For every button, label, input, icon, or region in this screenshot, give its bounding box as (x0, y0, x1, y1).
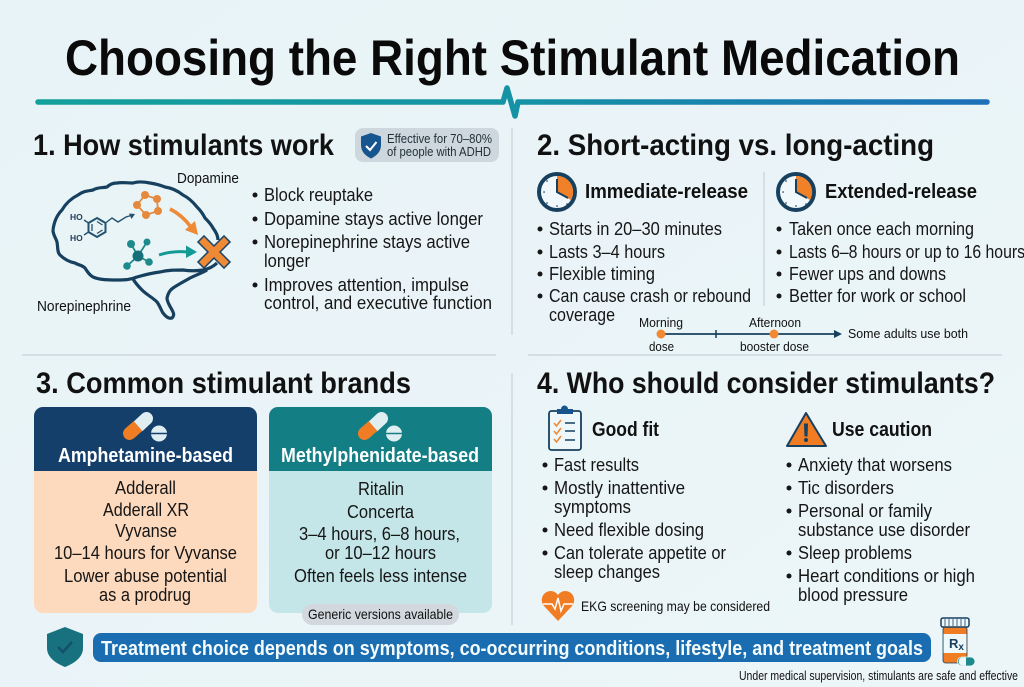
card text: as a prodrug (99, 585, 191, 605)
dopamine molecule structure (70, 212, 135, 243)
card text: Concerta (347, 502, 415, 522)
label: dopamine: Dopamine (177, 171, 239, 187)
brain stem (133, 270, 207, 318)
icon: pills (130, 418, 167, 442)
list: use caution: Anxiety that worsens (798, 455, 952, 475)
dopamine nodes (133, 191, 162, 219)
list: good fit: sleep changes (554, 562, 660, 582)
icon: warning triangle (787, 413, 826, 446)
card text (54, 478, 237, 605)
brain diagram (37, 171, 239, 318)
list: immediate-release: coverage (549, 305, 615, 325)
list: use caution: Tic disorders (798, 478, 894, 498)
banner (93, 633, 931, 662)
timeline: dosing: Afternoon (749, 315, 801, 330)
list: extended-release (776, 219, 1024, 306)
list: mechanisms: Block reuptake (264, 185, 373, 205)
list: mechanisms: Dopamine stays active longer (264, 209, 483, 229)
icon: orange X block (204, 242, 224, 262)
header rule with heartbeat spike (38, 88, 987, 116)
list: good fit: Fast results (554, 455, 639, 475)
heading: section 2: 2. Short-acting vs. long-acting (537, 129, 934, 162)
list: extended-release: Fewer ups and downs (789, 264, 946, 284)
list: extended-release: Better for work or school (789, 286, 966, 306)
card: amphetamine-based (34, 407, 257, 613)
list: good fit: symptoms (554, 497, 631, 517)
heading: section 1: 1. How stimulants work (33, 129, 335, 162)
timeline: dosing: booster dose (740, 339, 809, 354)
badge: effectiveness (355, 128, 499, 162)
timeline: dosing: Some adults use both (848, 326, 968, 341)
card text: Lower abuse potential (64, 566, 227, 586)
list: use caution: substance use disorder (798, 520, 970, 540)
card: amphetamine-based: Amphetamine-based (58, 445, 233, 467)
icon: Rx bottle: R (949, 636, 958, 651)
timeline: dosing (639, 315, 968, 354)
list: mechanisms: Norepinephrine stays active (264, 232, 470, 252)
subheading: use caution: Use caution (832, 418, 932, 441)
badge: effectiveness: of people with ADHD (387, 144, 491, 159)
list: good fit (542, 455, 726, 582)
pill label: generic versions: Generic versions available (308, 606, 453, 622)
subheading: extended-release: Extended-release (825, 180, 977, 203)
card: methylphenidate-based: Methylphenidate-based (281, 445, 479, 467)
brain outline (53, 182, 218, 280)
list: immediate-release (538, 219, 751, 325)
list: mechanisms: longer (264, 251, 310, 271)
list: immediate-release: Flexible timing (549, 264, 655, 284)
list: good fit: Mostly inattentive (554, 478, 685, 498)
card text: Often feels less intense (294, 566, 467, 586)
list: mechanisms (252, 185, 492, 313)
panel: how stimulants work (33, 128, 499, 318)
dopamine molecule structure: HO (70, 212, 83, 222)
panel: who should consider stimulants (537, 367, 995, 621)
note: EKG screening (542, 591, 770, 621)
icon: clock immediate-release (539, 174, 575, 210)
arrow: dopamine to block (170, 209, 198, 235)
icon: clock extended-release (778, 174, 814, 210)
card text: or 10–12 hours (325, 543, 436, 563)
icon: Rx bottle: x (958, 642, 964, 653)
list: immediate-release: Starts in 20–30 minutes (549, 219, 722, 239)
dopamine molecule structure: HO (70, 233, 83, 243)
card text (294, 479, 467, 586)
card text: Vyvanse (115, 521, 177, 541)
arrow: norepinephrine to block (159, 246, 197, 258)
subheading: good fit: Good fit (592, 418, 659, 441)
timeline: dosing: Morning (639, 315, 683, 330)
panel: short-acting vs long-acting (537, 129, 1024, 354)
label: norepinephrine: Norepinephrine (37, 299, 131, 315)
badge: effectiveness: Effective for 70–80% (387, 131, 492, 146)
note: EKG screening: EKG screening may be considered (581, 598, 770, 614)
icon: shield (47, 627, 83, 667)
card: methylphenidate-based (269, 407, 492, 625)
icon: Rx bottle (941, 618, 975, 666)
list: extended-release: Taken once each morning (789, 219, 974, 239)
timeline: dosing: dose (649, 339, 674, 354)
list: good fit: Need flexible dosing (554, 520, 704, 540)
footer: takeaway banner (47, 618, 1018, 683)
pill label: generic versions (302, 604, 459, 625)
list: use caution: Personal or family (798, 501, 932, 521)
subheading: immediate-release: Immediate-release (585, 180, 748, 203)
icon: clipboard checklist (549, 406, 581, 450)
heading: section 3: 3. Common stimulant brands (36, 367, 411, 400)
norepinephrine nodes (123, 238, 153, 270)
icon: pills (364, 418, 402, 442)
list: use caution (786, 455, 975, 605)
list: mechanisms: Improves attention, impulse (264, 275, 469, 295)
list: mechanisms: control, and executive function (264, 293, 492, 313)
list: good fit: Can tolerate appetite or (554, 543, 726, 563)
card text: Adderall XR (103, 500, 189, 520)
list: use caution: blood pressure (798, 585, 908, 605)
card text: Ritalin (358, 479, 404, 499)
card text: 10–14 hours for Vyvanse (54, 543, 237, 563)
card text: Adderall (115, 478, 176, 498)
title: Choosing the Right Stimulant Medication (65, 30, 960, 86)
list: immediate-release: Can cause crash or rebound (549, 286, 751, 306)
list: use caution: Sleep problems (798, 543, 912, 563)
list: use caution: Heart conditions or high (798, 566, 975, 586)
list: immediate-release: Lasts 3–4 hours (549, 242, 665, 262)
card text: 3–4 hours, 6–8 hours, (299, 524, 460, 544)
panel: common stimulant brands (34, 367, 492, 625)
banner text: Treatment choice depends on symptoms, co-occurring conditions, lifestyle, and treatment goals (101, 637, 923, 660)
